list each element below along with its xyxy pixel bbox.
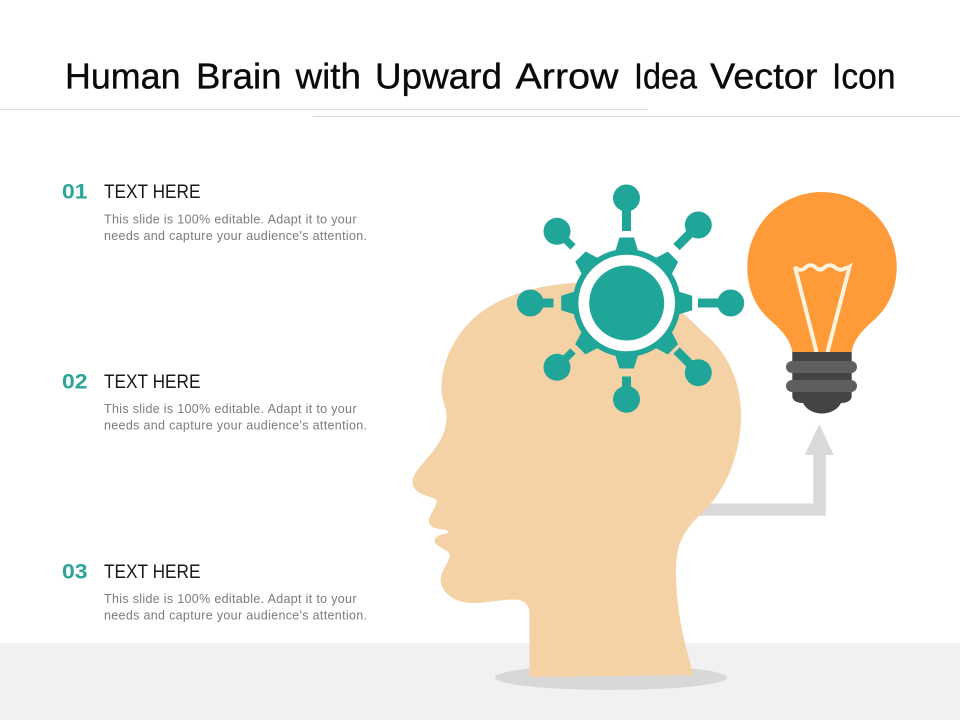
description 02: This slide is 100% editable. Adapt it to your [104,402,356,416]
head silhouette [412,283,741,677]
node top right [676,212,712,247]
description 01 [104,212,367,243]
node bottom right [676,350,712,386]
description 01: needs and capture your audience's attention. [104,229,367,243]
text block 01 [62,180,367,243]
title: Arrow [516,56,620,96]
floor band [0,643,960,720]
text block 02 [62,369,367,432]
title: with [294,56,361,96]
arrow: from head up to bulb [695,424,834,516]
node top [613,184,640,231]
icon: gear with nodes [517,184,744,413]
node bottom [613,376,640,413]
bulb glass [747,192,897,352]
description 01: This slide is 100% editable. Adapt it to your [104,212,356,226]
gear ring [573,249,681,357]
node top left [544,218,573,247]
icon: light bulb [747,192,897,414]
number 01: 01 [62,180,88,204]
title [65,56,896,96]
title: Idea [634,56,698,96]
description 03 [104,592,367,622]
base band upper [786,361,857,373]
node right [698,290,744,316]
gear teeth [561,238,692,368]
description 02: needs and capture your audience's attention. [104,418,367,432]
heading 01: TEXT HERE [104,181,200,203]
title: Upward [375,56,502,96]
description 03: needs and capture your audience's attention. [104,608,367,622]
gear hub [589,266,664,340]
number 02: 02 [62,369,88,393]
text block 03 [62,559,367,622]
base band lower [786,380,857,392]
description 03: This slide is 100% editable. Adapt it to your [104,592,356,606]
title: Icon [832,56,896,96]
description 02 [104,402,367,432]
bulb base [792,352,852,414]
filament [795,265,850,352]
title: Vector [710,56,818,96]
title: Brain [196,56,282,96]
title: Human [65,56,180,96]
head shadow [495,665,727,690]
heading 02: TEXT HERE [104,371,200,393]
node left [517,290,554,316]
node bottom left [544,351,573,381]
number 03: 03 [62,559,88,583]
heading 03: TEXT HERE [104,561,200,583]
